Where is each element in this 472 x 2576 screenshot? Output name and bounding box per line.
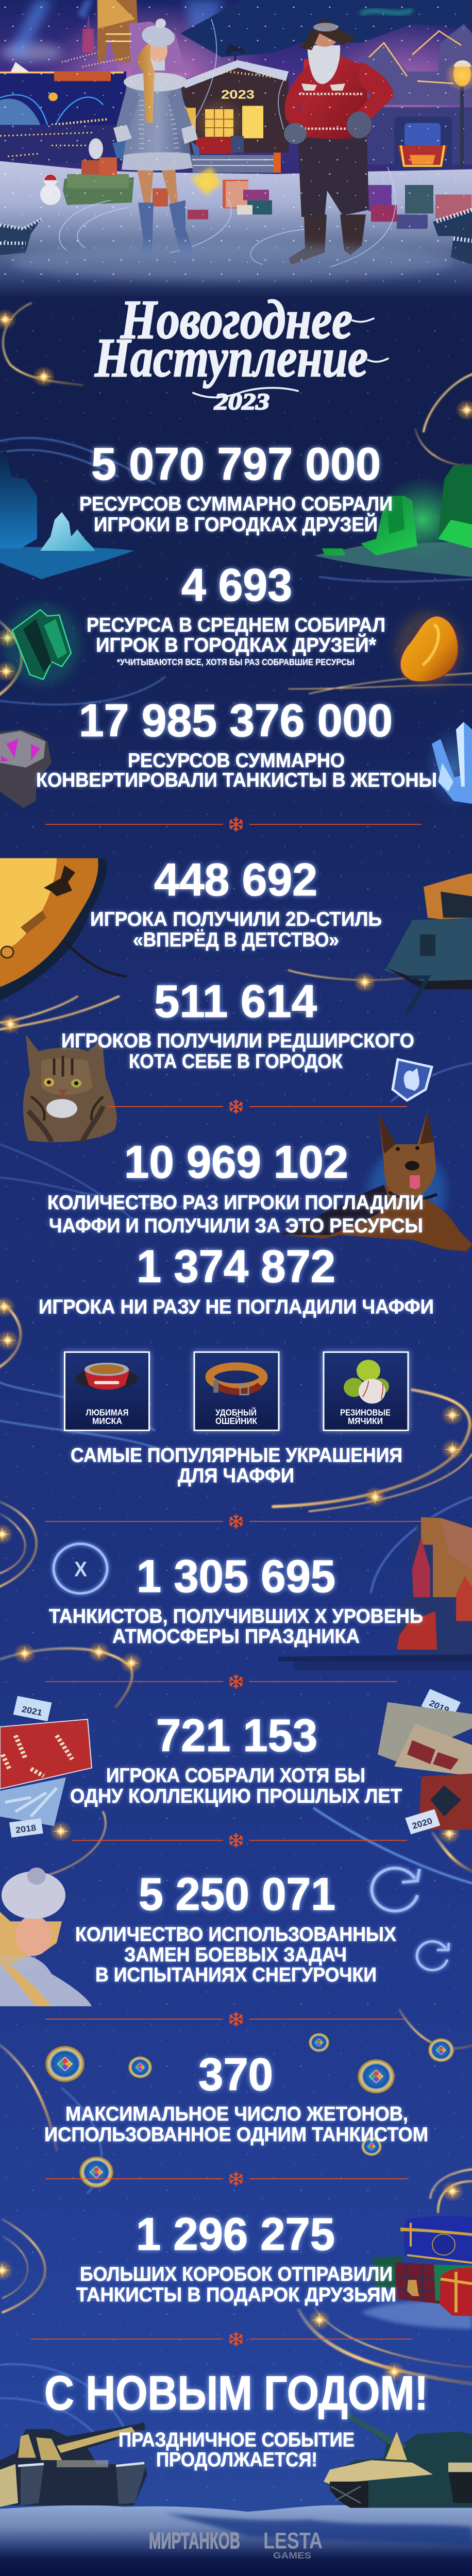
candy cane card [0,1719,92,1789]
card: comfortable collar [194,1352,279,1430]
panel: hero illustration [0,0,472,298]
title line 2: Наступление [94,327,368,388]
face [312,31,337,47]
logo: Mir Tankov: МИРТАНКОВ [149,2528,240,2553]
stat: petting chaffee [47,1136,424,1237]
number: 511 614 [154,975,317,1027]
caption line 1: САМЫЕ ПОПУЛЯРНЫЕ УКРАШЕНИЯ [71,1444,402,1466]
cat stripes [31,1056,103,1121]
number: 5 070 797 000 [91,438,381,489]
icon: cat badge [393,1059,432,1100]
caption line 1: МАКСИМАЛЬНОЕ ЧИСЛО ЖЕТОНОВ, [65,2103,408,2125]
frost card [0,1777,66,1826]
dividers [31,818,422,2346]
caption line 1: РЕСУРСОВ СУММАРНО [128,749,345,772]
arms [114,83,195,141]
red chest trim [441,2272,472,2312]
title flourishes [193,318,388,397]
icon: right tank [324,2410,472,2508]
number: 448 692 [154,854,317,905]
calendar year: 2019 [428,1698,451,1715]
label: РЕЗИНОВЫЕ [340,1407,391,1417]
snow ground [0,161,472,298]
number: 17 985 376 000 [79,694,393,746]
stat: 2D style [90,854,382,951]
weather vane cat [227,44,246,61]
calendar 2018 [9,1818,43,1838]
number: 4 693 [181,559,292,611]
caption line 2: ЗАМЕН БОЕВЫХ ЗАДАЧ [124,1943,347,1966]
hat [140,23,176,49]
stat: big boxes [76,2208,396,2306]
icon: maine coon cat [23,1035,117,1142]
village distant [0,125,139,163]
caption line 2: «ВПЕРЁД В ДЕТСТВО» [133,928,339,951]
snowy ground [0,546,134,579]
legs [137,167,178,205]
calendar year: 2021 [21,1704,43,1718]
icon: retro console [384,873,472,1013]
right houses [356,24,472,164]
candy pattern [3,1735,72,1776]
heading: popular decorations [71,1444,402,1487]
sky [0,0,472,200]
red chest [440,2268,472,2316]
stat: collections [70,1709,402,1807]
stat: converted resources [36,694,437,791]
caption line 2: ТАНКИСТЫ В ПОДАРОК ДРУЗЬЯМ [76,2283,396,2306]
icon: ice crystals [423,722,472,810]
caption line 1: ИГРОКОВ ПОЛУЧИЛИ РЕДШИРСКОГО [61,1029,414,1052]
sweater deer [301,83,345,91]
caption line 1: ИГРОКА ПОЛУЧИЛИ 2D-СТИЛЬ [90,908,382,930]
aurora [361,10,412,14]
illustration: glowing castle [278,1517,472,1670]
icon: red bowl [76,1363,138,1389]
icons: gift chests [361,2216,472,2329]
label: УДОБНЫЙ [215,1407,257,1417]
label line 2: МЯЧИКИ [348,1416,383,1426]
caption line 2: ИГРОКИ В ГОРОДКАХ ДРУЗЕЙ [94,513,378,536]
boots [138,200,195,260]
postcards left [0,1696,92,1838]
mittens [284,123,307,144]
stat: average per player [87,559,385,667]
footer snow [0,2505,472,2576]
icon: refresh arrows [372,1868,449,1970]
hem fur [122,152,193,171]
caption line 2: АТМОСФЕРЫ ПРАЗДНИКА [112,1624,360,1648]
grandfather frost [284,19,393,265]
lamp post [445,59,472,193]
number: 1 305 695 [137,1550,335,1602]
calendar 2020 [405,1809,440,1834]
icon: german shepherd dog [281,1111,472,1251]
dark crystals [0,451,37,548]
green band [434,2265,472,2301]
label line 2: МИСКА [92,1416,122,1426]
icon: green crystals [314,465,472,577]
bridge [0,62,126,126]
right gift pile [368,185,471,229]
number: 5 250 071 [139,1869,335,1920]
calendar 2021 [13,1696,52,1721]
centre gift pile [153,167,272,219]
caption line 1: КОЛИЧЕСТВО РАЗ ИГРОКИ ПОГЛАДИЛИ [47,1191,424,1213]
sky glows [0,0,472,162]
stat: collected resources [79,438,393,536]
pants [298,138,369,217]
aviator hat [299,19,357,50]
icon: retro gamepad [0,858,126,1001]
closing greeting [44,2366,428,2471]
golden trim [407,2223,472,2263]
gloves [112,141,200,160]
stat: redshire cat [61,975,414,1073]
plaid lines [396,2264,453,2303]
caption line 1: ИГРОКА СОБРАЛИ ХОТЯ БЫ [106,1764,365,1787]
coloured energy ribbons [0,438,472,2432]
number: 1 296 275 [136,2208,335,2260]
calendar 2019 [421,1689,461,1719]
mountains [180,0,472,57]
caption line 1: РЕСУРСОВ СУММАРНО СОБРАЛИ [79,493,393,515]
icons: tokens [45,2033,454,2188]
calendar year: 2018 [15,1823,37,1835]
label line 2: ОШЕЙНИК [215,1416,258,1426]
magic swirls [59,19,395,267]
logo: Lesta Games [263,2528,323,2561]
number: 370 [198,2048,273,2100]
subword: GAMES [273,2550,311,2561]
icon: balls [344,1360,389,1403]
reindeer knit [407,1740,459,1770]
hair and braid [138,42,155,123]
subline 1: ПРАЗДНИЧНОЕ СОБЫТИЕ [119,2428,355,2451]
caption line 1: БОЛЬШИХ КОРОБОК ОТПРАВИЛИ [80,2263,393,2285]
icon: amber stone [395,611,462,687]
stat: mission replacements [75,1869,396,1986]
fir branches [0,210,472,265]
caption line 2: ДЛЯ ЧАФФИ [178,1464,294,1487]
snow maiden [112,19,200,260]
light crystals [40,512,95,551]
beard [307,45,340,84]
label: ЛЮБИМАЯ [86,1407,129,1417]
card: favourite bowl [65,1352,149,1430]
sweater pattern [299,94,363,129]
icon: emerald gem [4,604,81,685]
plaid chest [395,2262,453,2305]
wordmark: LESTA [263,2528,323,2553]
number: 721 153 [156,1709,317,1761]
comic card [378,1702,472,1761]
caption line 1: РЕСУРСА В СРЕДНЕМ СОБИРАЛ [87,614,385,636]
number: 10 969 102 [124,1136,348,1188]
house [180,60,289,173]
sweater card [394,1723,472,1776]
caption line 1: КОЛИЧЕСТВО ИСПОЛЬЗОВАННЫХ [75,1923,396,1945]
coat [123,88,193,170]
carpet card [418,1774,472,1830]
stat: never petted [39,1241,434,1318]
star emblem [432,2234,455,2255]
caption line 2: ОДНУ КОЛЛЕКЦИЮ ПРОШЛЫХ ЛЕТ [70,1784,402,1807]
frost detail [5,1788,57,1817]
jukebox [394,117,452,170]
sweater [299,54,369,139]
caption line 2: ИГРОК В ГОРОДКАХ ДРУЗЕЙ* [96,633,376,656]
caption line 1: ТАНКИСТОВ, ПОЛУЧИВШИХ Х УРОВЕНЬ [49,1605,423,1628]
sparkle snow veil [10,243,453,281]
card: rubber balls [324,1352,408,1430]
caption line 2: ЧАФФИ И ПОЛУЧИЛИ ЗА ЭТО РЕСУРСЫ [49,1214,423,1237]
panel: favourite decorations [65,1352,408,1430]
postcards right [378,1689,472,1834]
face [149,40,167,62]
icon: leather collar [210,1366,263,1395]
icon: level X badge [54,1544,107,1594]
collar [124,73,188,92]
carpet ornament [430,1786,461,1817]
icon: rock with magenta veins [0,730,52,808]
number: 1 374 872 [137,1241,335,1292]
caption line 3: В ИСПЫТАНИЯХ СНЕГУРОЧКИ [95,1963,377,1986]
stat: tokens [44,2048,428,2146]
title line 1: Новогоднее [120,289,352,350]
footnote: *УЧИТЫВАЮТСЯ ВСЕ, ХОТЯ БЫ РАЗ СОБРАВШИЕ РЕСУРСЫ [117,657,355,667]
green chest [373,2256,402,2289]
left gift pile [40,138,134,205]
house number sign: 2023 [221,88,255,101]
icon: blue crystals on ice [0,451,134,579]
stat: level X [49,1550,423,1648]
blue chest lid [400,2228,472,2236]
calendar year: 2020 [411,1816,434,1831]
title year: 2023 [214,389,269,415]
footer snow shadows [165,2514,472,2546]
caption line 2: КОТА СЕБЕ В ГОРОДОК [129,1049,343,1073]
icon: left tank [0,2422,147,2507]
coat embroidery [142,100,178,152]
title lettering [94,289,388,415]
badge mark: X [74,1557,87,1581]
arms [284,62,393,134]
blue chest [403,2216,472,2263]
castle [62,0,186,83]
boots [289,214,366,265]
portrait: snow maiden [0,1868,92,2006]
snow [361,2300,472,2329]
stocking [407,2280,419,2296]
falling snow [0,0,472,286]
subline 2: ПРОДОЛЖАЕТСЯ! [156,2448,317,2471]
